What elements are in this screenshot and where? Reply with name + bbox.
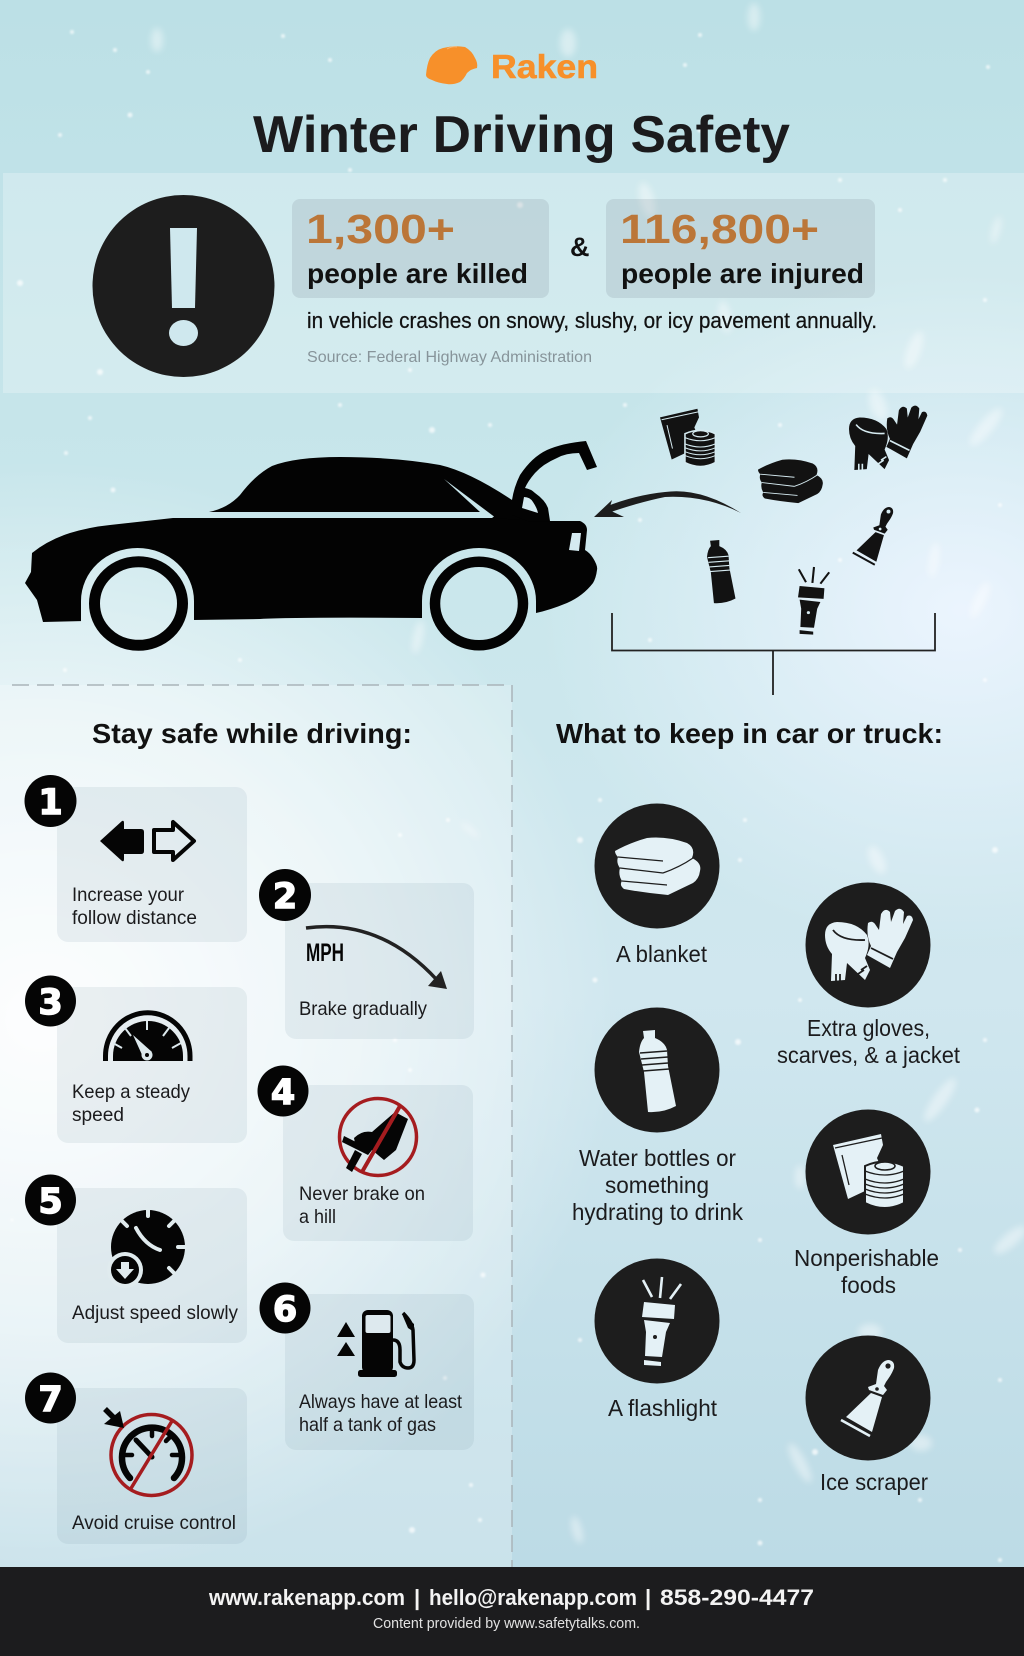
footer: www.rakenapp.com [208, 1585, 405, 1610]
item: blanket: A blanket [616, 941, 708, 967]
step 3: speed [72, 1104, 124, 1126]
step 5: Adjust speed slowly [72, 1302, 238, 1324]
step 6 [260, 1282, 474, 1450]
step 3: Keep a steady [72, 1081, 190, 1103]
item: flashlight [594, 1258, 720, 1421]
step 6: half a tank of gas [299, 1414, 436, 1436]
item: ice scraper: Ice scraper [820, 1469, 928, 1495]
step 6: Always have at least [299, 1391, 463, 1413]
logo: Raken [426, 46, 598, 85]
step 4: a hill [299, 1206, 336, 1228]
step 7 [25, 1372, 247, 1544]
panel: stay safe while driving [0, 685, 512, 1567]
item: water bottles: Water bottles or [579, 1145, 736, 1171]
icon: car with open trunk [25, 441, 597, 645]
stat: injured: people are injured [621, 258, 864, 289]
step 7: 7 [38, 1380, 63, 1420]
step 2: MPH [306, 939, 344, 967]
step 5: 5 [38, 1182, 63, 1222]
footer [0, 1567, 1024, 1656]
footer: 858-290-4477 [660, 1585, 814, 1610]
panel: what to keep in car [556, 718, 961, 1495]
source: Source: Federal Highway Administration [307, 349, 592, 366]
stat description: in vehicle crashes on snowy, slushy, or icy pavement annually. [307, 308, 877, 333]
icon: flashlight [798, 567, 829, 635]
arrow: to trunk [594, 491, 741, 517]
item: gloves and scarves: scarves, & a jacket [777, 1042, 961, 1068]
step 1: Increase your [72, 884, 184, 906]
logo: Raken: Raken [491, 48, 598, 85]
step 1: follow distance [72, 907, 197, 929]
step 1: 1 [38, 783, 63, 823]
stat: killed: people are killed [307, 258, 528, 289]
footer: Content provided by www.safetytalks.com. [373, 1615, 640, 1632]
item: gloves and scarves: Extra gloves, [807, 1015, 930, 1041]
item: blanket [594, 804, 720, 967]
item: water bottles: something [605, 1172, 709, 1198]
icon: foods [660, 409, 715, 466]
item: water bottles [572, 1008, 743, 1225]
item: flashlight: A flashlight [608, 1395, 718, 1421]
stat: injured [606, 199, 875, 298]
step 2: 2 [273, 877, 297, 917]
stat: killed [292, 199, 549, 298]
item: foods: foods [841, 1272, 896, 1298]
footer: | [645, 1585, 651, 1610]
step 6: 6 [273, 1290, 297, 1330]
footer: | [414, 1585, 420, 1610]
footer: hello@rakenapp.com [429, 1585, 637, 1610]
ampersand: & [570, 232, 590, 262]
step 4: 4 [271, 1073, 295, 1113]
item: water bottles: hydrating to drink [572, 1199, 743, 1225]
step 3: 3 [38, 983, 63, 1023]
icon: blanket [758, 459, 823, 503]
item: foods [794, 1110, 939, 1298]
step 2: Brake gradually [299, 998, 427, 1020]
step 4 [258, 1066, 473, 1241]
icon: ice scraper [853, 507, 893, 565]
heading: what to keep: What to keep in car or truck: [556, 718, 943, 749]
step 3 [25, 976, 247, 1143]
panel: statistics [3, 173, 1024, 393]
step 7: Avoid cruise control [72, 1512, 236, 1534]
step 1 [24, 775, 247, 942]
step 5 [25, 1174, 247, 1343]
bracket [612, 613, 935, 695]
stat: killed: 1,300+ [306, 206, 455, 252]
stat: injured: 116,800+ [620, 206, 819, 252]
title: Winter Driving Safety [253, 106, 790, 164]
icon: gloves and scarf [849, 406, 927, 470]
step 2 [259, 869, 474, 1039]
heading: stay safe: Stay safe while driving: [92, 718, 412, 749]
step 4: Never brake on [299, 1183, 425, 1205]
item: ice scraper [806, 1336, 930, 1495]
item: gloves and scarves [777, 882, 961, 1068]
icon group: items above trunk [660, 406, 927, 635]
icon: water bottle [707, 540, 735, 603]
item: foods: Nonperishable [794, 1245, 939, 1271]
icon: exclamation [92, 195, 274, 377]
